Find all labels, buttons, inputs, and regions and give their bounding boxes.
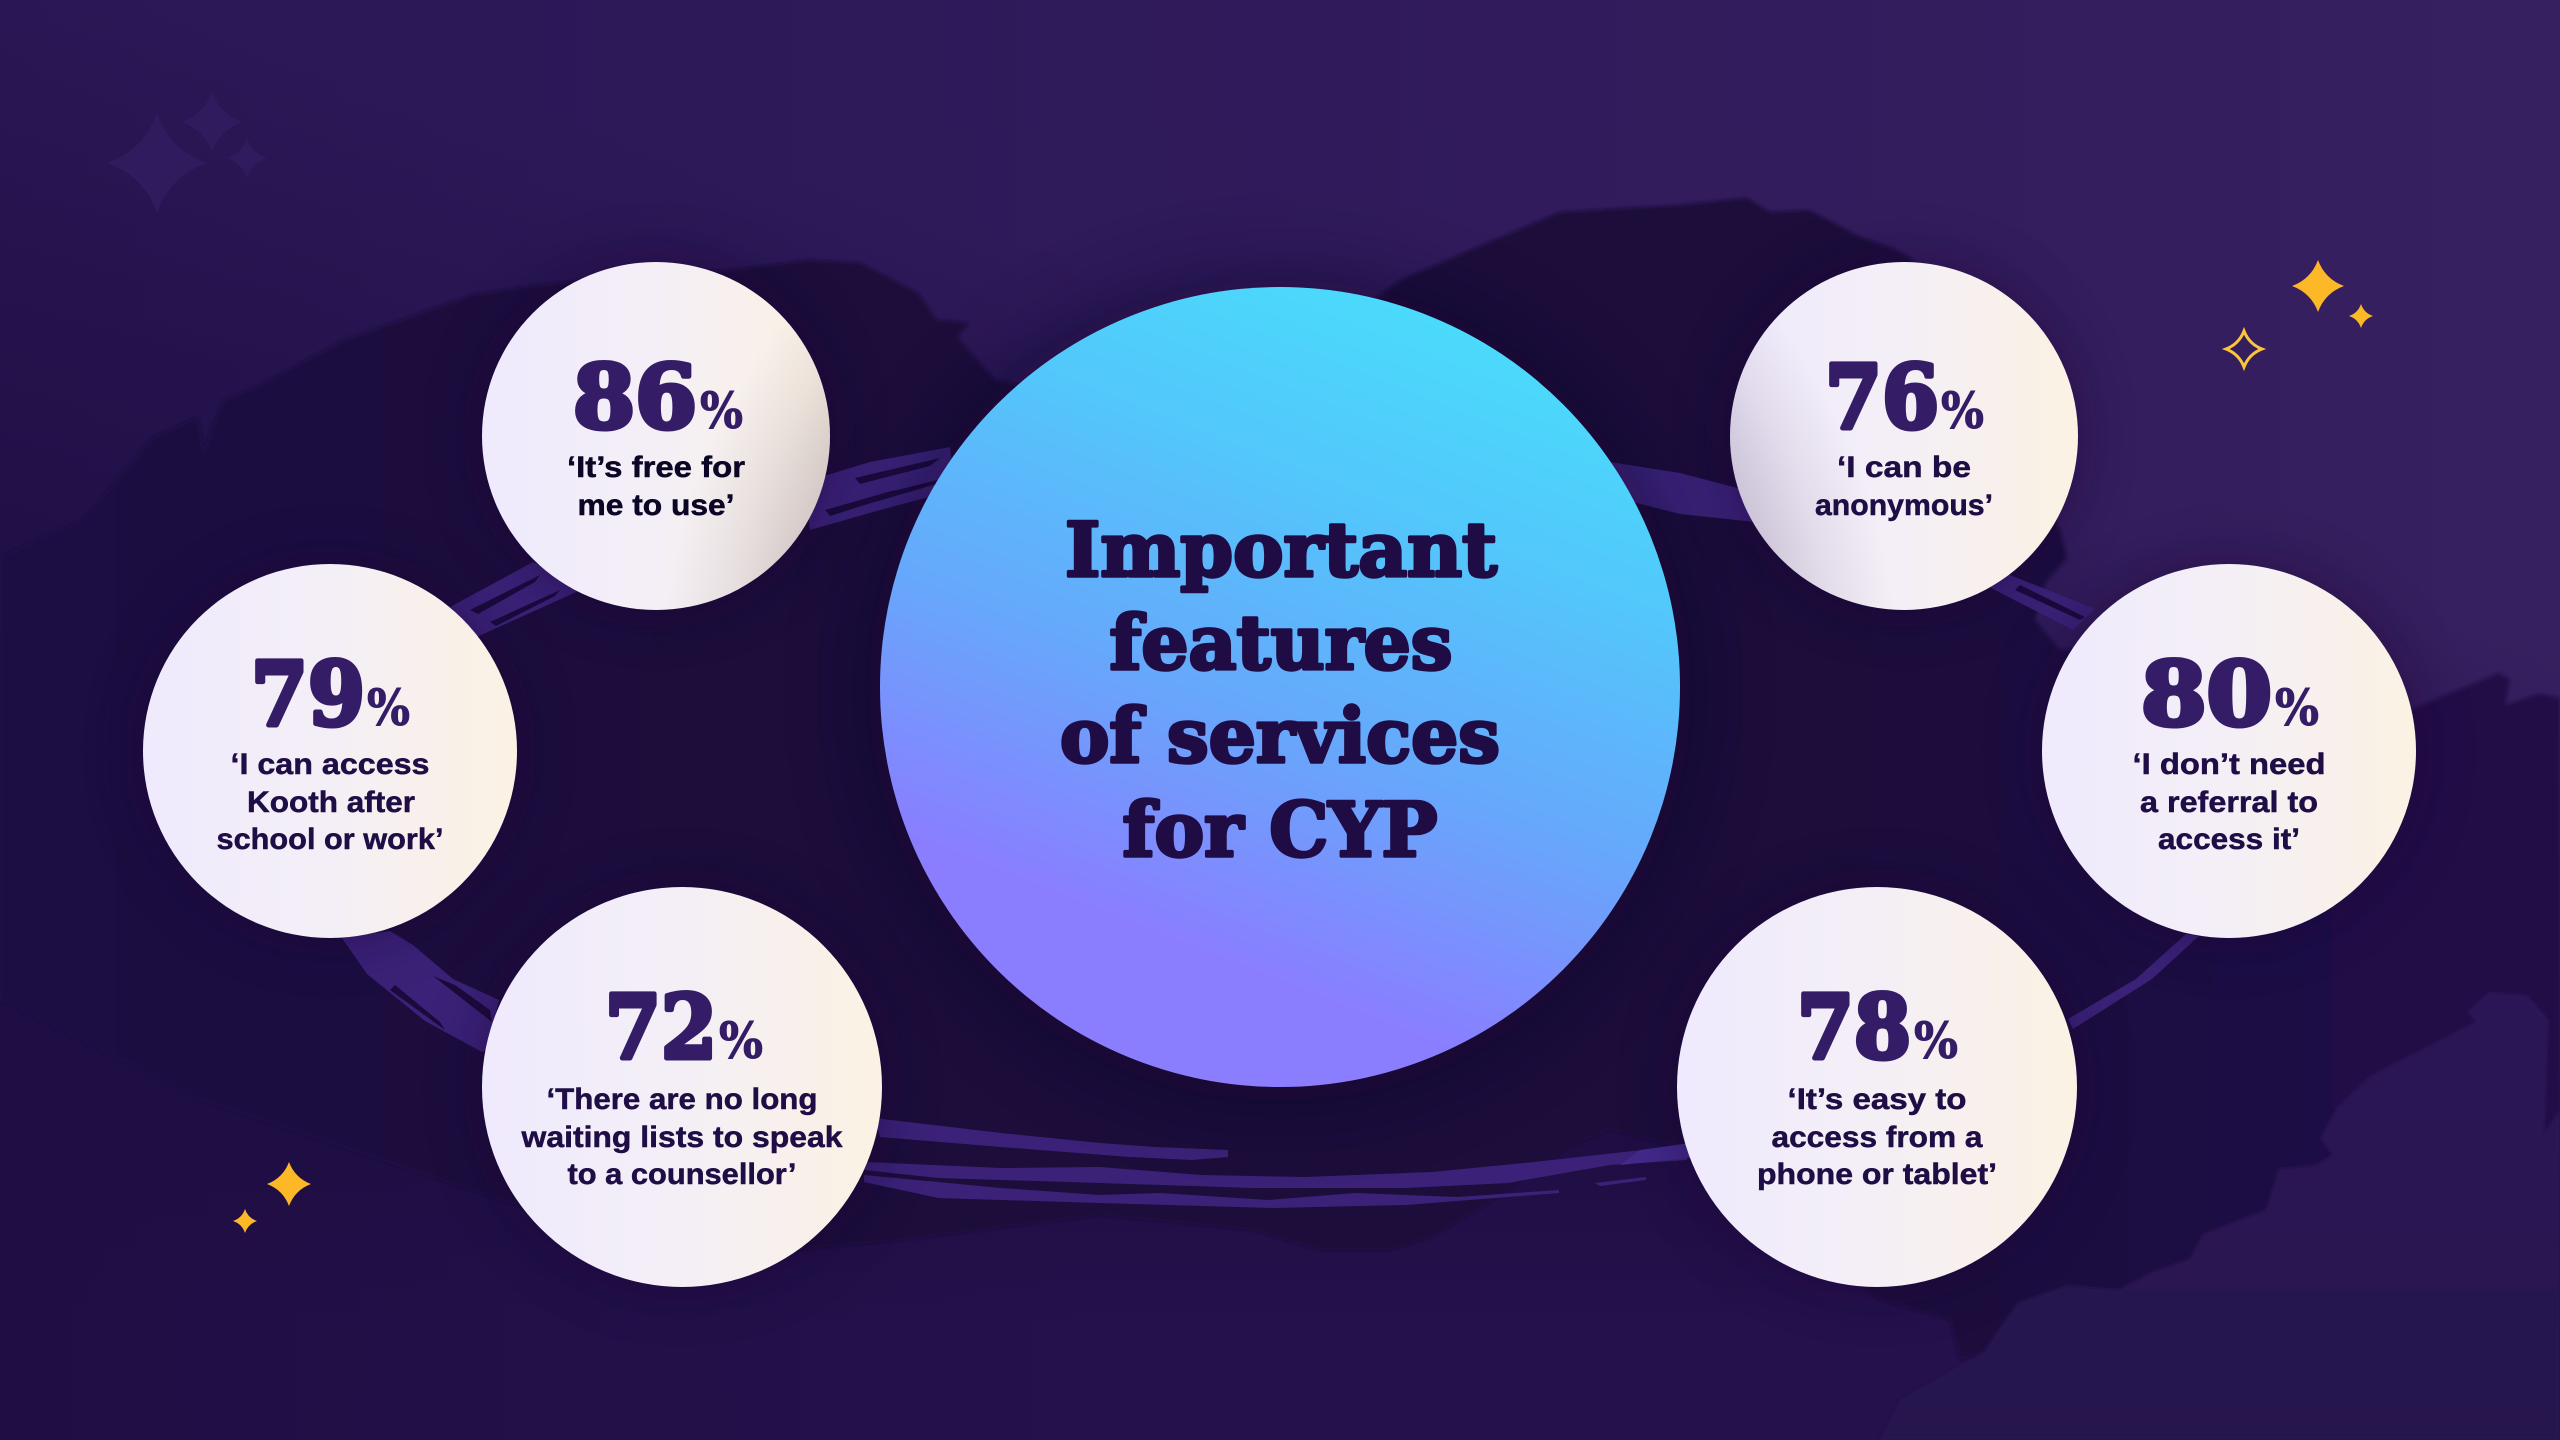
label — [216, 748, 444, 856]
value 86%: % — [700, 381, 743, 440]
value 72%: 72 — [605, 975, 717, 1079]
label: access it’ — [2158, 823, 2300, 856]
label: ‘I can be — [1837, 451, 1971, 484]
label: ‘It’s free for — [567, 451, 745, 484]
circle: 72% — [482, 887, 882, 1287]
label: anonymous’ — [1815, 489, 1993, 522]
label: access from a — [1772, 1121, 1983, 1154]
title — [1060, 506, 1500, 874]
label — [2132, 748, 2326, 856]
central circle shadow — [870, 280, 1690, 1100]
label — [567, 451, 745, 522]
sparkle outline — [2226, 331, 2262, 367]
label: ‘I don’t need — [2132, 748, 2326, 781]
sparkle large — [2292, 260, 2344, 312]
circle: 76% — [1730, 262, 2078, 610]
label: phone or tablet’ — [1757, 1158, 1997, 1191]
title: features — [1110, 599, 1452, 687]
value 80% — [2141, 642, 2319, 746]
title: for CYP — [1122, 786, 1438, 874]
sparkle small — [2349, 304, 2373, 328]
sparkles: bottom left — [233, 1162, 311, 1233]
value 76%: % — [1941, 381, 1984, 440]
label: me to use’ — [578, 489, 734, 522]
sparkles: top right — [2226, 260, 2373, 367]
title: Important — [1065, 506, 1497, 594]
circle: 80% — [2042, 564, 2416, 938]
value 79%: 79 — [251, 642, 365, 746]
label — [1815, 451, 1993, 522]
value 72%: % — [719, 1011, 763, 1070]
value 86%: 86 — [573, 345, 697, 449]
title: of services — [1060, 692, 1500, 780]
decorative faint sparkles — [107, 92, 267, 213]
brush: lower right — [2068, 934, 2199, 1029]
value 76%: 76 — [1825, 345, 1939, 449]
circle: 86% — [482, 262, 830, 610]
brush: left lower — [342, 931, 505, 1052]
label — [520, 1083, 843, 1191]
label: to a counsellor’ — [568, 1158, 796, 1191]
brush ring behind circles — [342, 447, 2199, 1208]
central circle — [880, 287, 1680, 1087]
label: ‘I can access — [230, 748, 430, 781]
label: ‘It’s easy to — [1788, 1083, 1966, 1116]
value 80%: 80 — [2141, 642, 2272, 746]
label: waiting lists to speak — [520, 1121, 843, 1154]
value 78%: % — [1914, 1011, 1958, 1070]
brush: upper left near 86 — [450, 447, 955, 640]
label: Kooth after — [247, 786, 415, 819]
background: lower right blob — [1880, 993, 2560, 1440]
brush: upper right — [1610, 462, 2095, 630]
value 78%: 78 — [1797, 975, 1911, 1079]
value 80%: % — [2275, 678, 2319, 737]
label — [1757, 1083, 1997, 1191]
circle: 79% — [143, 564, 517, 938]
label: ‘There are no long — [546, 1083, 818, 1116]
circle: 78% — [1677, 887, 2077, 1287]
label: school or work’ — [216, 823, 444, 856]
brush: bottom — [864, 1118, 1690, 1208]
value 79%: % — [367, 678, 410, 737]
label: a referral to — [2140, 786, 2318, 819]
